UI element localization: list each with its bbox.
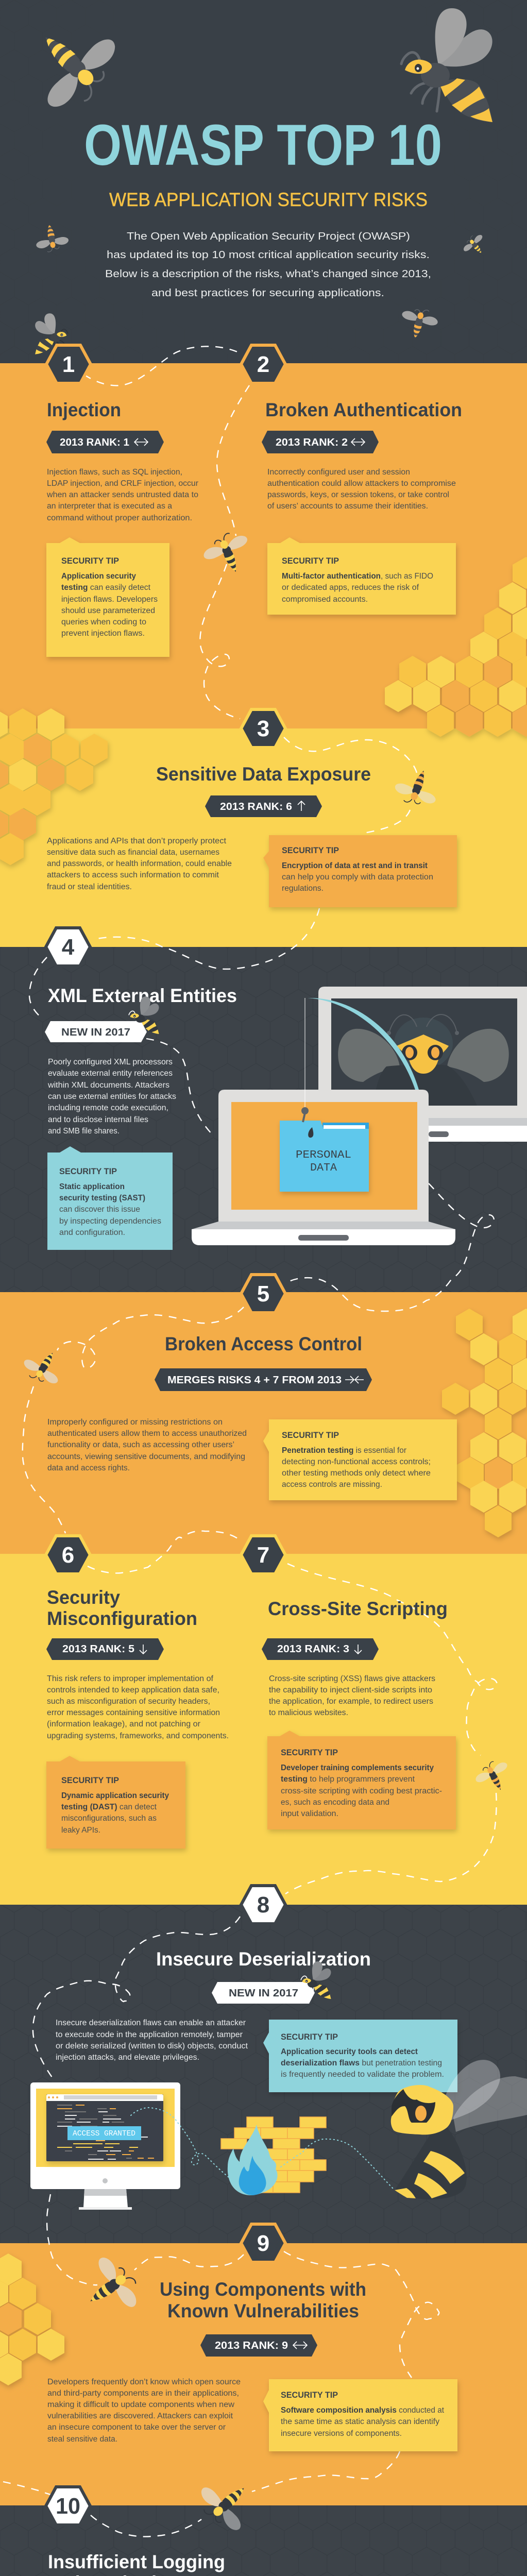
description: authentication could allow attackers to compromise: [267, 479, 456, 488]
dotted data path: [131, 2108, 395, 2190]
security tip: access controls are missing.: [282, 1480, 382, 1489]
security tip: Penetration testing is essential for: [282, 1446, 406, 1455]
rank badge: [46, 1638, 164, 1660]
number hex 7: [241, 1536, 285, 1574]
description: Cross-site scripting (XSS) flaws give attackers: [269, 1674, 435, 1683]
description: to execute code in the application remotely, tamper: [56, 2030, 243, 2039]
description: accounts, viewing sensitive documents, and modifying: [47, 1452, 245, 1461]
description: controls intended to keep application data safe,: [47, 1686, 219, 1694]
description: [46, 468, 198, 522]
description: Developers frequently don’t know which open source: [47, 2378, 241, 2386]
rank badge: [200, 2334, 317, 2357]
number hex 6: 6: [62, 1543, 74, 1568]
rank badge: [262, 431, 379, 453]
number hex 9: [241, 2224, 285, 2262]
security tip: misconfigurations, such as: [61, 1814, 157, 1823]
security tip: other testing methods only detect where: [282, 1469, 431, 1478]
panel: 9 using components: [47, 2224, 457, 2451]
panel: 7 cross-site scripting: [241, 1536, 456, 1829]
heading: Sensitive Data Exposure: [156, 764, 371, 785]
intro paragraph: The Open Web Application Security Project (OWASP): [127, 231, 410, 242]
description: attackers to access such information to commit: [47, 871, 219, 879]
security tip: detecting non-functional access controls;: [282, 1458, 431, 1466]
honeycomb: section 5 right: [442, 1309, 527, 1537]
illustration: attacker laptop with bee face: [308, 987, 527, 1142]
number hex 10: [46, 2487, 90, 2525]
security tip: Software composition analysis conducted at: [281, 2406, 445, 2415]
panel: 8 insecure deserialization: [30, 1886, 527, 2210]
security tip: testing to help programmers prevent: [281, 1775, 415, 1784]
security tip: the same time as static analysis can identify: [281, 2417, 439, 2426]
heading: Misconfiguration: [47, 1608, 197, 1629]
panel: 10 insufficient logging: [46, 2487, 527, 2576]
description: [47, 2378, 241, 2444]
honeycomb: section 9 left: [0, 2253, 64, 2385]
description: can use external entities for attacks: [48, 1092, 176, 1101]
security tip: prevent injection flaws.: [61, 629, 145, 638]
header bee: small right: [460, 231, 490, 261]
description: injection attacks, and elevate privileges.: [56, 2053, 199, 2062]
heading: XML External Entities: [48, 985, 237, 1006]
security tip: security testing (SAST): [59, 1194, 145, 1202]
heading: Insufficient Logging: [48, 2551, 225, 2572]
bee at section 9 and 10 border: [192, 2468, 262, 2538]
rank badge: 2013 RANK: 2: [276, 437, 348, 448]
panel: 4 xml external entities: [45, 928, 527, 1250]
number hex 9: 9: [257, 2231, 269, 2256]
description: error messages containing sensitive information: [47, 1708, 220, 1717]
number hex 2: [241, 345, 285, 383]
intro paragraph: Below is a description of the risks, what’s changed since 2013,: [105, 268, 431, 280]
number hex 8: 8: [257, 1892, 269, 1918]
security tip: SECURITY TIP: [61, 556, 119, 566]
security tip: [47, 1146, 173, 1250]
number hex 3: 3: [257, 716, 269, 741]
heading: Broken Access Control: [165, 1333, 362, 1354]
folder label: PERSONAL: [296, 1149, 351, 1161]
security tip: [267, 537, 456, 615]
security tip: cross-site scripting with coding best practic-: [281, 1787, 442, 1795]
description: and to disclose internal files: [48, 1115, 148, 1124]
heading: Insecure Deserialization: [156, 1948, 371, 1970]
intro paragraph: and best practices for securing applications.: [151, 287, 384, 299]
description: Incorrectly configured user and session: [267, 468, 410, 477]
security tip: compromised accounts.: [282, 595, 368, 604]
security tip: regulations.: [282, 884, 324, 893]
security tip: SECURITY TIP: [281, 2032, 338, 2042]
security tip: Static application: [59, 1182, 125, 1191]
security tip: is frequently needed to validate the problem.: [281, 2070, 444, 2079]
security tip: es, such as encoding data and: [281, 1798, 389, 1807]
description: of users’ accounts to assume their identities.: [267, 502, 428, 511]
heading: Known Vulnerabilities: [167, 2300, 359, 2321]
heading: Injection: [47, 399, 121, 420]
security tip: [46, 537, 169, 657]
subtitle: WEB APPLICATION SECURITY RISKS: [109, 189, 428, 210]
description: (information leakage), and not patching or: [47, 1720, 200, 1728]
header bee: above hex 2 side: [397, 304, 440, 343]
heading: [47, 1587, 197, 1629]
heading: [160, 2279, 366, 2321]
new badge: [212, 1982, 315, 2004]
security tip: leaky APIs.: [61, 1826, 100, 1835]
security tip: insecure versions of components.: [281, 2429, 402, 2438]
heading: Broken Authentication: [265, 399, 462, 420]
description: data and access rights.: [47, 1464, 130, 1472]
description: sensitive data such as financial data, usernames: [47, 848, 219, 857]
description: [267, 468, 456, 511]
description: or delete serialized (written to disk) objects, conduct: [56, 2042, 248, 2050]
title: OWASP TOP 10: [84, 113, 442, 177]
description: steal sensitive data.: [47, 2435, 117, 2444]
security tip: by inspecting dependencies: [59, 1217, 161, 1226]
number hex 6: [46, 1536, 90, 1574]
number hex 8: [241, 1886, 285, 1924]
security tip: [267, 1731, 456, 1829]
security tip: SECURITY TIP: [61, 1775, 119, 1785]
heading: Security: [47, 1587, 120, 1608]
security tip: deserialization flaws but penetration testing: [281, 2059, 442, 2067]
honeycomb: section 3 upper left: [0, 708, 108, 865]
description: Applications and APIs that don’t properly protect: [47, 837, 227, 845]
security tip: SECURITY TIP: [281, 1748, 338, 1757]
description: Improperly configured or missing restrictions on: [47, 1418, 223, 1427]
security tip: [263, 835, 457, 907]
folder label: [296, 1149, 351, 1174]
security tip: Dynamic application security: [61, 1791, 169, 1800]
description: [47, 837, 232, 891]
description: This risk refers to improper implementation of: [47, 1674, 214, 1683]
header bee: top right large: [401, 8, 492, 122]
honeycomb: section 2 lower right: [385, 557, 527, 737]
rank badge: 2013 RANK: 9: [215, 2340, 288, 2351]
new badge: NEW IN 2017: [61, 1027, 130, 1038]
description: [47, 1674, 229, 1740]
description: an insecure component to take over the server or: [47, 2423, 226, 2432]
description: authenticated users allow them to access unauthorized: [47, 1429, 247, 1438]
security tip: SECURITY TIP: [282, 556, 339, 566]
description: fraud or steal identities.: [47, 883, 132, 891]
security tip: SECURITY TIP: [282, 845, 339, 855]
rank badge: [205, 795, 322, 817]
description: the application, for example, to redirect users: [269, 1697, 433, 1706]
rank badge: [46, 431, 164, 453]
security tip: [263, 2020, 457, 2092]
description: upgrading systems, frameworks, and components.: [47, 1732, 229, 1740]
security tip: testing can easily detect: [61, 583, 151, 592]
folder label: DATA: [310, 1162, 337, 1174]
rank badge: 2013 RANK: 1: [60, 437, 129, 448]
new badge: NEW IN 2017: [229, 1988, 298, 1999]
bee between 1 and 2: [199, 527, 258, 581]
bee near section 3: [392, 764, 444, 811]
bee near section 7: [472, 1756, 516, 1798]
description: Injection flaws, such as SQL injection,: [47, 468, 182, 477]
security tip: injection flaws. Developers: [61, 595, 158, 604]
description: the capability to inject client-side scripts into: [269, 1686, 432, 1694]
header bee: top left: [14, 6, 129, 121]
description: including remote code execution,: [48, 1104, 168, 1112]
access granted label: ACCESS GRANTED: [73, 2129, 135, 2138]
description: functionality or data, such as accessing other users’: [47, 1440, 234, 1449]
panel: 5 broken access control: [47, 1275, 457, 1500]
number hex 2: 2: [257, 352, 269, 377]
rank badge: 2013 RANK: 3: [277, 1643, 349, 1655]
bee near section 9 left: [74, 2249, 147, 2325]
access granted label: [67, 2126, 141, 2140]
bee on new badge 8: [301, 1961, 331, 1999]
illustration: brick firewall and flame: [221, 2117, 326, 2195]
rank badge: 2013 RANK: 6: [220, 801, 292, 812]
security tip: queries when coding to: [61, 618, 146, 626]
description: making it difficult to update components when new: [47, 2400, 235, 2409]
description: [47, 1418, 247, 1472]
description: [56, 2019, 248, 2062]
number hex 7: 7: [257, 1543, 269, 1568]
heading: Using Components with: [160, 2279, 366, 2300]
security tip: Developer training complements security: [281, 1764, 434, 1772]
panel: 6 security misconfiguration: [46, 1536, 229, 1849]
merges badge: [155, 1368, 372, 1391]
description: vulnerabilities are discovered. Attackers can exploit: [47, 2412, 233, 2420]
security tip: should use parameterized: [61, 606, 155, 615]
description: Insecure deserialization flaws can enable an attacker: [56, 2019, 246, 2027]
description: within XML documents. Attackers: [47, 1081, 169, 1090]
header bee: small left: [33, 222, 70, 254]
description: and SMB file shares.: [48, 1127, 120, 1136]
security tip: [263, 1419, 457, 1500]
description: when an attacker sends untrusted data to: [46, 490, 198, 499]
intro paragraph: [105, 231, 431, 299]
intro paragraph: has updated its top 10 most critical application security risks.: [107, 249, 430, 261]
description: passwords, keys, or session tokens, or take control: [267, 490, 449, 499]
number hex 3: [241, 709, 285, 748]
security tip: SECURITY TIP: [59, 1166, 117, 1176]
description: an interpreter that is executed as a: [47, 502, 172, 511]
security tip: [46, 1756, 185, 1849]
security tip: input validation.: [281, 1809, 338, 1818]
security tip: testing (DAST) can detect: [61, 1803, 157, 1811]
number hex 1: [46, 345, 91, 383]
illustration: monitor with code: [30, 2082, 180, 2210]
security tip: [263, 2379, 457, 2451]
description: to malicious websites.: [269, 1708, 348, 1717]
merges badge: MERGES RISKS 4 + 7 FROM 2013: [167, 1375, 342, 1386]
security tip: can help you comply with data protection: [282, 873, 433, 882]
illustration: large bee: [391, 2060, 527, 2199]
panel: 2 broken authentication: [241, 345, 462, 615]
bee near section 5: [19, 1343, 69, 1391]
bee on new badge 4: [129, 996, 159, 1034]
header bee: above hex 1: [35, 313, 68, 354]
security tip: SECURITY TIP: [282, 1430, 339, 1440]
rank badge: 2013 RANK: 5: [62, 1643, 134, 1655]
number hex 5: [241, 1275, 285, 1313]
panel: 1 injection: [46, 345, 198, 657]
description: and passwords, or health information, could enable: [47, 859, 232, 868]
number hex 4: [46, 928, 90, 966]
panel: 3 sensitive data exposure: [47, 709, 457, 907]
number hex 1: 1: [62, 352, 75, 377]
security tip: and configuration.: [59, 1228, 125, 1237]
number hex 5: 5: [257, 1281, 269, 1307]
description: LDAP injection, and CRLF injection, occur: [47, 479, 198, 488]
security tip: can discover this issue: [59, 1205, 140, 1214]
description: evaluate external entity references: [48, 1069, 173, 1078]
illustration: victim laptop with phished folder: [192, 998, 455, 1245]
security tip: SECURITY TIP: [281, 2390, 338, 2400]
security tip: Encryption of data at rest and in transit: [282, 861, 428, 870]
security tip: or dedicated apps, reduces the risk of: [282, 583, 419, 592]
rank badge: [262, 1638, 379, 1660]
description: [269, 1674, 435, 1717]
description: command without proper authorization.: [47, 514, 192, 522]
security tip: Multi-factor authentication, such as FIDO: [282, 572, 433, 581]
description: Poorly configured XML processors: [48, 1058, 173, 1066]
security tip: Application security: [61, 572, 136, 581]
description: [47, 1058, 176, 1136]
description: such as misconfiguration of security headers,: [47, 1697, 210, 1706]
number hex 10: 10: [56, 2494, 80, 2519]
security tip: Application security tools can detect: [281, 2047, 418, 2056]
number hex 4: 4: [62, 935, 75, 960]
new badge: [45, 1021, 147, 1042]
description: and third-party components are in their applications,: [47, 2389, 239, 2398]
heading: Cross-Site Scripting: [268, 1598, 448, 1619]
